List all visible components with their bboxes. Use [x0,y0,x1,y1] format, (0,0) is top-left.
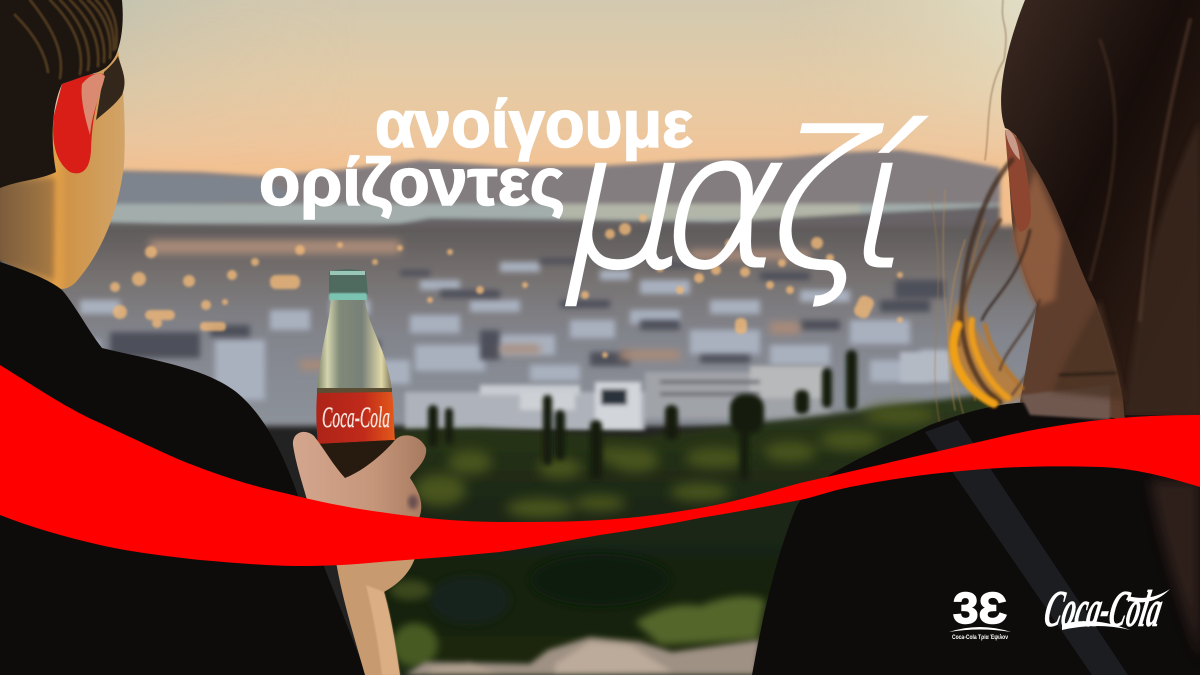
bokeh lights [110,214,903,358]
logo: 3E Coca-Cola Tria Epsilon: 3Ɛ [953,584,1007,633]
person: right, hair and shirt [752,0,1200,675]
jacket [0,262,366,675]
bottle of Coca-Cola [316,269,395,481]
loose hair strands behind [930,0,1006,425]
city warm patches [150,240,810,370]
background: distant mountains and sea [100,150,1000,250]
hand holding bottle [293,432,426,675]
red ribbon wave [0,365,1200,566]
skin [1006,135,1125,420]
hair strands [954,20,1190,404]
person: left, back of head and jacket [0,0,366,675]
sideburn [96,56,125,120]
headline [259,87,949,311]
background: blurred city [0,214,1200,430]
orange glow of hair [950,300,1030,405]
glass body [317,300,392,392]
city light patches [70,262,950,400]
headline word: together: μαζί [546,94,949,311]
cola liquid [317,440,394,481]
neck shadow [0,178,55,280]
forearm [335,555,416,675]
background: sunset sky [54,0,1025,231]
ear [1005,130,1031,232]
neck and lip [329,269,368,295]
logo: 3E Coca-Cola Tria Epsilon: Coca-Cola Τρία Έψιλον [952,635,1009,641]
bag strap [925,420,1128,675]
background: green park trees [380,350,1000,675]
headline line 2: ορίζοντες [259,145,565,220]
city dark patches [110,258,945,366]
skin: face and neck [0,50,125,289]
hair highlights [15,0,117,78]
foreground buildings [405,352,950,430]
shirt [752,400,1200,675]
rocks at bottom [405,637,760,675]
label [316,392,395,444]
headline line 1: ανοίγουμε [375,87,693,162]
hair [1001,0,1200,415]
hair [0,0,123,188]
ear [53,74,104,173]
label wordmark: Coca-Cola [322,401,390,434]
